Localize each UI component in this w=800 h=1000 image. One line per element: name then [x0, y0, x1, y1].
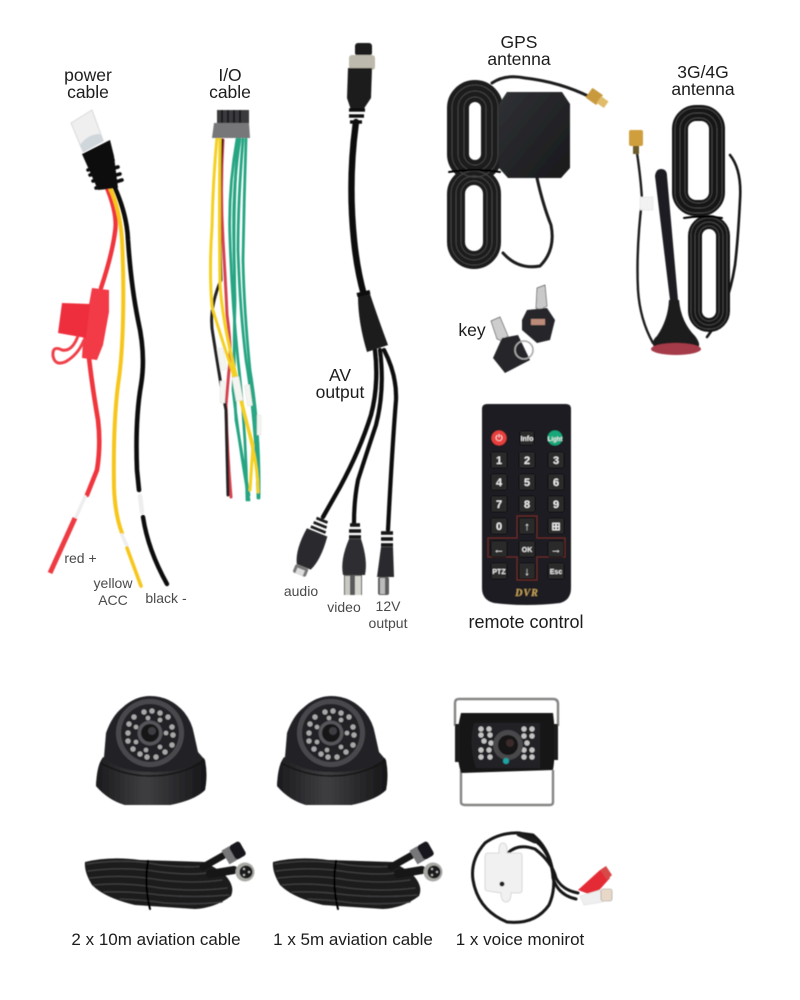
number keys: 7	[496, 499, 502, 511]
antenna whip	[655, 169, 678, 300]
cable coil	[451, 85, 498, 265]
voice monitor	[472, 833, 612, 922]
label: key: key	[458, 320, 486, 340]
cables	[472, 833, 554, 922]
label: AV output: AV	[329, 365, 351, 385]
DVR logo: DVR	[514, 588, 539, 599]
label: I/O cable: cable	[209, 82, 251, 102]
connector	[71, 110, 103, 152]
label: yellow ACC: ACC	[98, 592, 128, 608]
green wires	[230, 139, 259, 500]
label: AV output: output	[316, 382, 364, 402]
bracket	[455, 699, 558, 805]
label: black -: black -	[145, 590, 187, 606]
status LED	[503, 758, 509, 764]
truck camera	[455, 699, 558, 805]
label: video: video	[327, 599, 361, 615]
label: audio: audio	[284, 583, 318, 599]
power button: ⏻	[495, 433, 503, 443]
remote control	[482, 404, 571, 605]
number keys: Esc	[550, 569, 562, 576]
label: GPS antenna: antenna	[487, 49, 551, 69]
black wire	[115, 188, 143, 490]
aviation cable coil 1	[85, 841, 254, 909]
number keys: OK	[522, 547, 532, 554]
number keys: 1	[496, 455, 502, 467]
label: remote control: remote control	[468, 612, 584, 632]
audio plug	[289, 516, 333, 580]
label: 12V output: output	[369, 615, 408, 631]
label: red +: red +	[64, 550, 97, 566]
aviation cable coil 2	[273, 841, 442, 909]
power cable	[50, 110, 167, 586]
label: I/O cable: I/O	[218, 65, 242, 85]
number keys: ↓	[524, 566, 530, 578]
video plug	[342, 525, 366, 595]
red wire	[101, 188, 116, 288]
dome camera 2	[277, 696, 388, 805]
yellow wires	[210, 137, 258, 492]
SMA connector	[629, 130, 643, 154]
number keys: 6	[553, 477, 559, 489]
cables	[351, 122, 364, 295]
info button: Info	[521, 436, 533, 443]
thin lead	[637, 153, 653, 343]
black wire	[212, 140, 228, 495]
top plug	[355, 43, 372, 56]
black strain relief	[82, 140, 118, 190]
fuse holder	[53, 288, 109, 363]
info button	[520, 431, 534, 445]
splitter	[358, 294, 388, 352]
number keys: 9	[553, 499, 559, 511]
number keys: ↑	[524, 521, 530, 533]
label: GPS antenna: GPS	[501, 32, 537, 52]
tail cable	[503, 178, 552, 267]
number keys: ←	[494, 544, 504, 556]
top lead to connector	[492, 77, 590, 97]
body	[457, 713, 555, 773]
AV output cable	[289, 43, 396, 595]
number keys: 2	[524, 455, 530, 467]
magnetic base	[653, 300, 699, 349]
3G/4G antenna	[629, 108, 740, 355]
key right	[522, 285, 555, 343]
light button	[548, 430, 562, 446]
label: power cable: power	[64, 65, 112, 85]
antenna puck	[499, 92, 570, 178]
number keys: 4	[496, 477, 503, 489]
wire tags	[217, 348, 261, 435]
yellow wire	[110, 188, 123, 533]
label: 1 x voice monirot: 1 x voice monirot	[456, 930, 585, 949]
keys	[491, 285, 555, 373]
key ring	[515, 341, 533, 359]
label: yellow ACC: yellow	[94, 575, 133, 591]
number keys: 8	[524, 499, 530, 511]
number keys: PTZ	[492, 569, 506, 576]
I/O cable	[210, 110, 261, 500]
number keys: →	[550, 544, 562, 556]
number keys: ⊞	[551, 521, 561, 533]
SMA connector	[586, 88, 610, 110]
red RCA	[578, 866, 612, 896]
cable coil	[675, 108, 740, 337]
number keys	[491, 452, 564, 579]
module box	[485, 843, 522, 902]
label: 3G/4G antenna: antenna	[671, 79, 735, 99]
label: 12V output: 12V	[376, 598, 401, 614]
key left	[491, 317, 530, 373]
number keys: 0	[496, 521, 502, 533]
number keys: 5	[524, 477, 530, 489]
number keys: 3	[553, 455, 559, 467]
lens	[493, 730, 523, 760]
LEDs	[478, 726, 535, 760]
dome camera 1	[96, 696, 206, 805]
light button: Light	[548, 437, 562, 443]
label: 3G/4G antenna: 3G/4G	[677, 62, 729, 82]
power button	[492, 430, 506, 446]
arrow cross outline	[488, 516, 565, 580]
label: 2 x 10m aviation cable: 2 x 10m aviation cable	[71, 930, 241, 949]
red wire	[222, 140, 231, 497]
label: power cable: cable	[67, 82, 109, 102]
white RCA	[580, 889, 612, 905]
GPS antenna	[449, 77, 610, 267]
12V plug	[377, 533, 394, 595]
label: 1 x 5m aviation cable: 1 x 5m aviation cable	[273, 930, 433, 949]
connector	[217, 110, 249, 124]
